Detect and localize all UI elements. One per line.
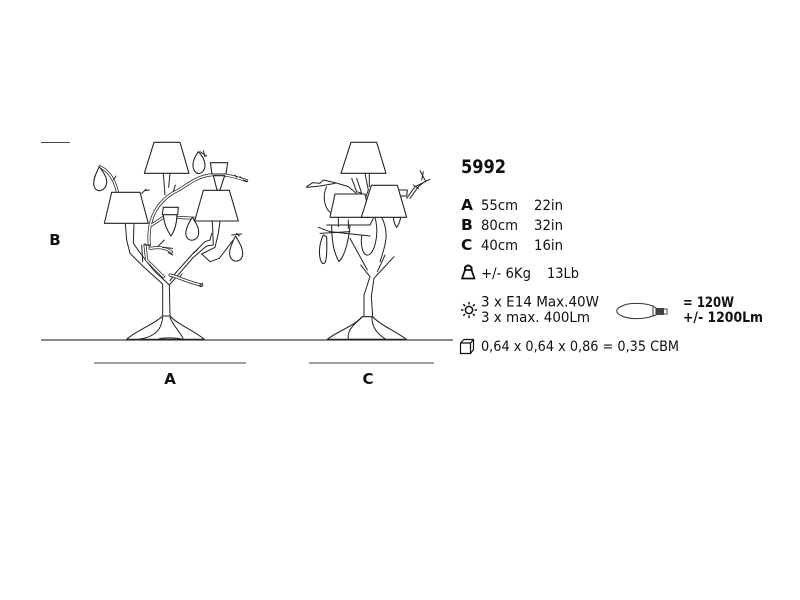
shade: top [144, 142, 189, 173]
height reference line [41, 142, 70, 144]
shade: rear left [330, 194, 370, 217]
shade: small right with drop [393, 190, 407, 227]
shade: front [361, 185, 407, 217]
shade: right [195, 190, 238, 221]
total power [683, 295, 763, 326]
shade: left [104, 192, 148, 223]
shade: centre with drop [162, 207, 178, 236]
icon: box [460, 340, 474, 354]
dimension label C: C [362, 370, 374, 388]
base [127, 316, 204, 339]
drop: left hanging [332, 225, 350, 262]
shade: top [341, 142, 386, 173]
lamp specification: 3 x E14 Max.40W [481, 294, 599, 310]
dimension line C [309, 362, 434, 364]
pear: centre [186, 217, 199, 240]
lamp side view [307, 142, 430, 339]
drop: far left [319, 235, 327, 264]
pear: left [94, 167, 107, 191]
pear: right [230, 236, 243, 261]
dimension label B: B [49, 231, 61, 249]
weight values: 13Lb [547, 266, 579, 282]
dimensions list: B [461, 216, 473, 234]
dimensions list: A [461, 196, 473, 214]
dimensions list: 40cm [481, 238, 518, 254]
icon: bulb [617, 303, 667, 319]
weight values: +/- 6Kg [481, 266, 531, 282]
dimensions list: 16in [534, 238, 563, 254]
lamp specification: 3 x max. 400Lm [481, 310, 590, 326]
model number: 5992 [461, 157, 506, 178]
dimensions list: C [461, 236, 472, 254]
dimensions list: 32in [534, 218, 563, 234]
volume: 0,64 x 0,64 x 0,86 = 0,35 CBM [481, 339, 679, 355]
icon: light source [461, 302, 477, 318]
dimensions list: 80cm [481, 218, 518, 234]
total power: = 120W [683, 295, 734, 311]
weight values [481, 266, 579, 282]
lamp specification [481, 294, 599, 326]
dimensions list: 22in [534, 198, 563, 214]
lamp front view [94, 142, 247, 339]
dimensions list: 55cm [481, 198, 518, 214]
base [327, 317, 406, 339]
total power: +/- 1200Lm [683, 310, 763, 326]
dimension line A [94, 362, 246, 364]
shade: small rear with drop [210, 163, 228, 190]
icon: weight [462, 266, 474, 278]
dimension label A: A [164, 370, 176, 388]
floor line [41, 339, 453, 341]
pear: top [193, 152, 205, 173]
dimensions list [461, 196, 563, 254]
